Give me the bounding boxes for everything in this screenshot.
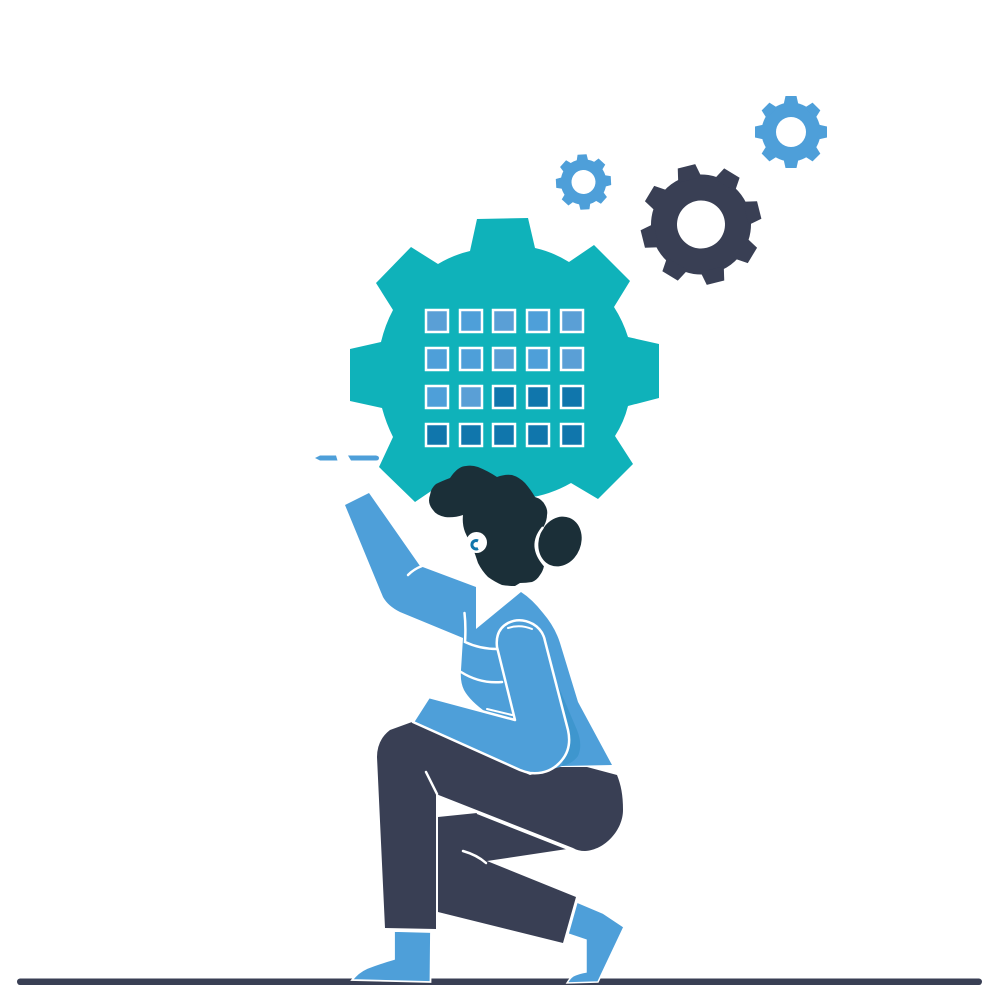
ground line xyxy=(17,978,982,985)
hip slit xyxy=(426,772,437,794)
shirt fold shadow xyxy=(557,683,580,766)
shirt white lines xyxy=(408,566,512,715)
knee slit xyxy=(463,851,486,863)
gear: dark xyxy=(628,152,774,297)
hair tie xyxy=(536,528,544,565)
thigh underside line xyxy=(477,813,573,851)
ear xyxy=(466,532,487,553)
neck and face xyxy=(462,515,522,630)
gear body xyxy=(350,218,659,502)
gear: small blue xyxy=(555,153,612,211)
hair bun xyxy=(531,510,589,573)
shirt xyxy=(345,493,612,775)
gear: top right blue xyxy=(755,96,827,168)
earring xyxy=(472,541,478,549)
lower leg xyxy=(438,813,576,943)
left foot xyxy=(352,931,431,982)
pencil xyxy=(315,456,379,460)
person xyxy=(345,466,624,983)
arm highlight xyxy=(508,626,532,629)
right foot xyxy=(567,902,624,983)
hair xyxy=(429,466,547,586)
near arm xyxy=(413,620,569,773)
upper leg xyxy=(377,722,623,929)
large teal gear with calendar grid xyxy=(350,218,659,502)
calendar grid xyxy=(426,310,583,446)
